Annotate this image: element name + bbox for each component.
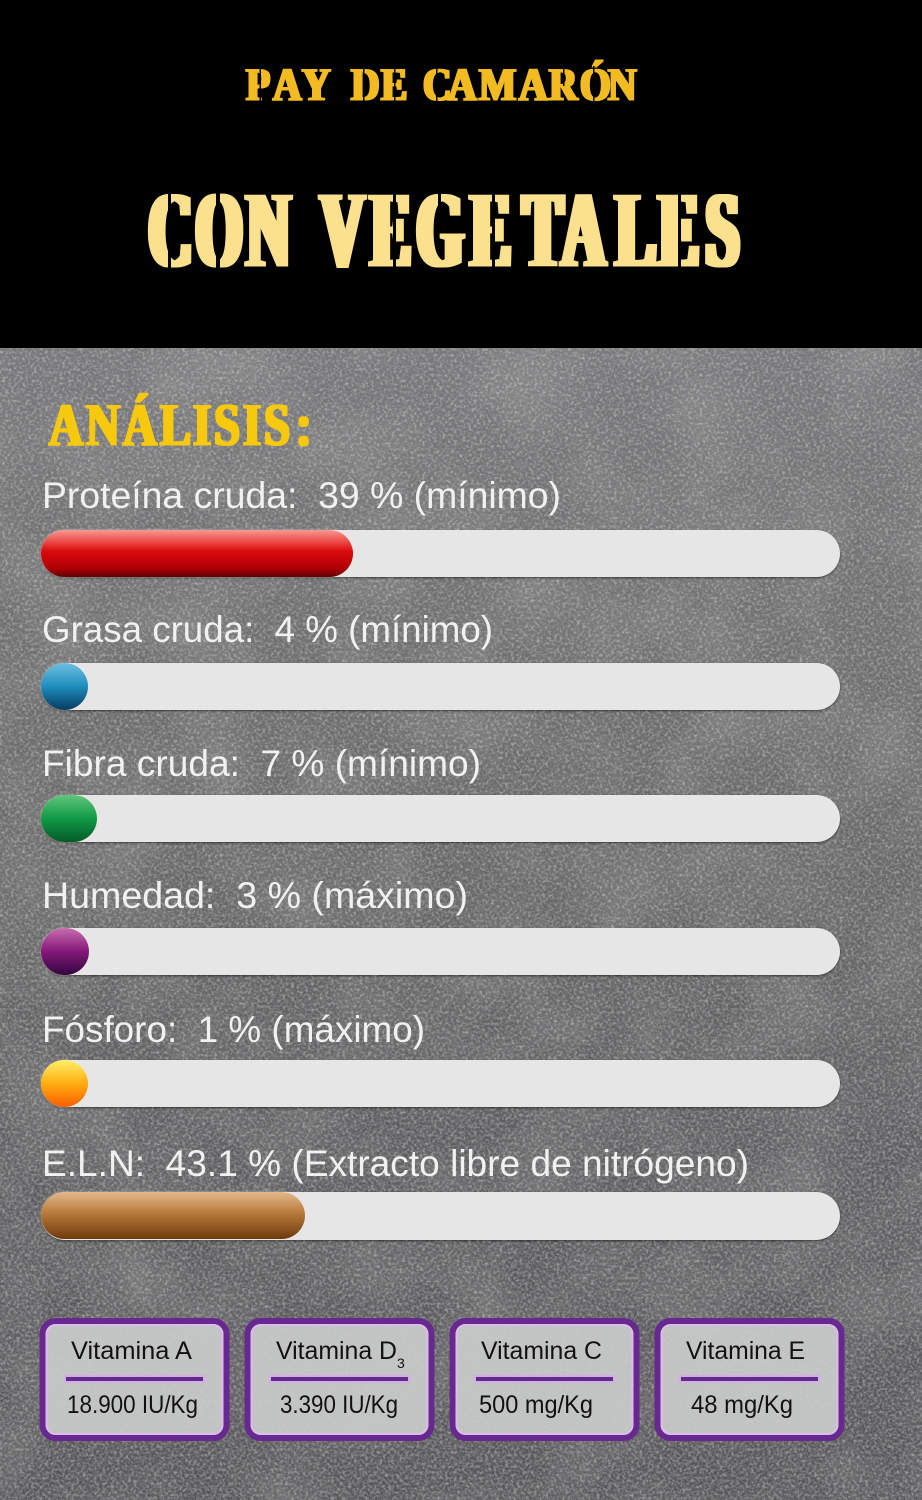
metric: fibra cruda [41,743,840,842]
bar track [41,530,840,577]
heading: analysis: ANÁLISIS: [49,391,312,458]
bar track [41,663,840,710]
label: Fósforo: 1 % (máximo) [42,1009,425,1050]
bar fill [41,1192,305,1239]
label: Fibra cruda: 7 % (mínimo) [42,743,481,784]
bar fill [41,928,89,975]
name: Vitamina A [71,1337,192,1365]
metric: E.L.N [41,1143,840,1240]
card: vitamina D3 [248,1321,432,1438]
title: second line: CON VEGETALES [149,169,739,290]
metric: proteína cruda [41,475,840,577]
bar fill [41,1060,88,1107]
label: Proteína cruda: 39 % (mínimo) [42,475,561,516]
label: Humedad: 3 % (máximo) [42,875,468,916]
metric: grasa cruda [41,609,840,710]
value: 3.390 IU/Kg [280,1391,398,1419]
value: 500 mg/Kg [479,1391,593,1419]
name: Vitamina D [276,1337,397,1365]
value: 48 mg/Kg [691,1391,793,1419]
label: Grasa cruda: 4 % (mínimo) [42,609,493,650]
value: 18.900 IU/Kg [67,1391,198,1419]
bar track [41,928,840,975]
card: vitamina A [42,1321,226,1438]
label: E.L.N: 43.1 % (Extracto libre de nitrógeno) [42,1143,749,1184]
bar track [41,795,840,842]
metric: fósforo [41,1009,840,1107]
card: vitamina C [452,1321,636,1438]
header band [0,0,922,348]
concrete background [0,348,922,1500]
name: Vitamina C [481,1337,602,1365]
title: first line: PAY DE CAMARÓN [246,58,637,111]
card: vitamina D3: 3 [397,1355,405,1371]
metric: humedad [41,875,840,975]
bar fill [41,530,353,577]
bar track [41,1060,840,1107]
card: vitamina E [658,1321,842,1438]
bar fill [41,795,97,842]
bar track [41,1192,840,1240]
bar fill [41,663,88,710]
name: Vitamina E [686,1337,805,1365]
